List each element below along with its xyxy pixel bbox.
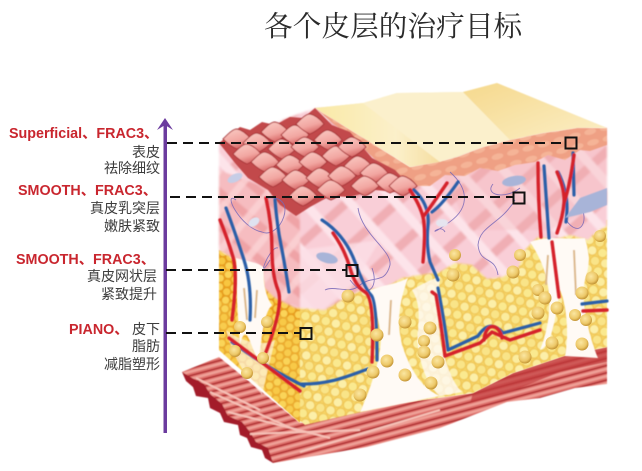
label: papillary dermis: 真皮乳突层 bbox=[90, 200, 160, 216]
label: reticular dermis: SMOOTH、FRAC3、 bbox=[16, 252, 155, 268]
label: reticular dermis: 紧致提升 bbox=[101, 286, 157, 302]
fibroblast cells bbox=[226, 171, 607, 266]
label: subcutaneous fat: PIANO、 bbox=[69, 322, 129, 338]
label: epidermis bbox=[9, 126, 160, 176]
skin scales bbox=[219, 108, 417, 216]
blue veins bbox=[226, 153, 607, 386]
skin cross-section illustration bbox=[182, 83, 607, 463]
dermis bbox=[219, 108, 607, 310]
label: epidermis: 祛除细纹 bbox=[104, 160, 160, 176]
leader line: epidermis bbox=[167, 138, 576, 148]
fat globules bbox=[229, 230, 606, 402]
label: subcutaneous fat: 皮下 bbox=[132, 321, 160, 337]
top skin surface bbox=[315, 83, 607, 167]
label: papillary dermis bbox=[18, 183, 160, 234]
arrow: depth axis bbox=[157, 118, 173, 433]
label: subcutaneous fat: 脂肪 bbox=[132, 338, 160, 354]
title: 各个皮层的治疗目标 bbox=[264, 11, 524, 43]
blood vessels bbox=[220, 153, 607, 391]
red arteries bbox=[220, 155, 607, 391]
fat layer bbox=[219, 220, 607, 425]
muscle layer bbox=[182, 347, 607, 463]
epidermis bbox=[315, 108, 607, 186]
leader line: subcutaneous fat bbox=[166, 328, 312, 339]
leader line: papillary dermis bbox=[170, 192, 524, 204]
label: papillary dermis: SMOOTH、FRAC3、 bbox=[18, 183, 157, 199]
label: papillary dermis: 嫩肤紧致 bbox=[104, 218, 160, 234]
label: reticular dermis: 真皮网状层 bbox=[87, 268, 157, 284]
connective strands bbox=[226, 238, 598, 412]
label: epidermis: Superficial、FRAC3、 bbox=[9, 126, 158, 142]
capillary network bbox=[231, 172, 584, 291]
label: subcutaneous fat: 减脂塑形 bbox=[104, 356, 160, 372]
label: reticular dermis bbox=[16, 252, 157, 302]
leader line: reticular dermis bbox=[166, 265, 358, 276]
label: subcutaneous fat bbox=[69, 321, 160, 372]
label: epidermis: 表皮 bbox=[132, 144, 160, 160]
